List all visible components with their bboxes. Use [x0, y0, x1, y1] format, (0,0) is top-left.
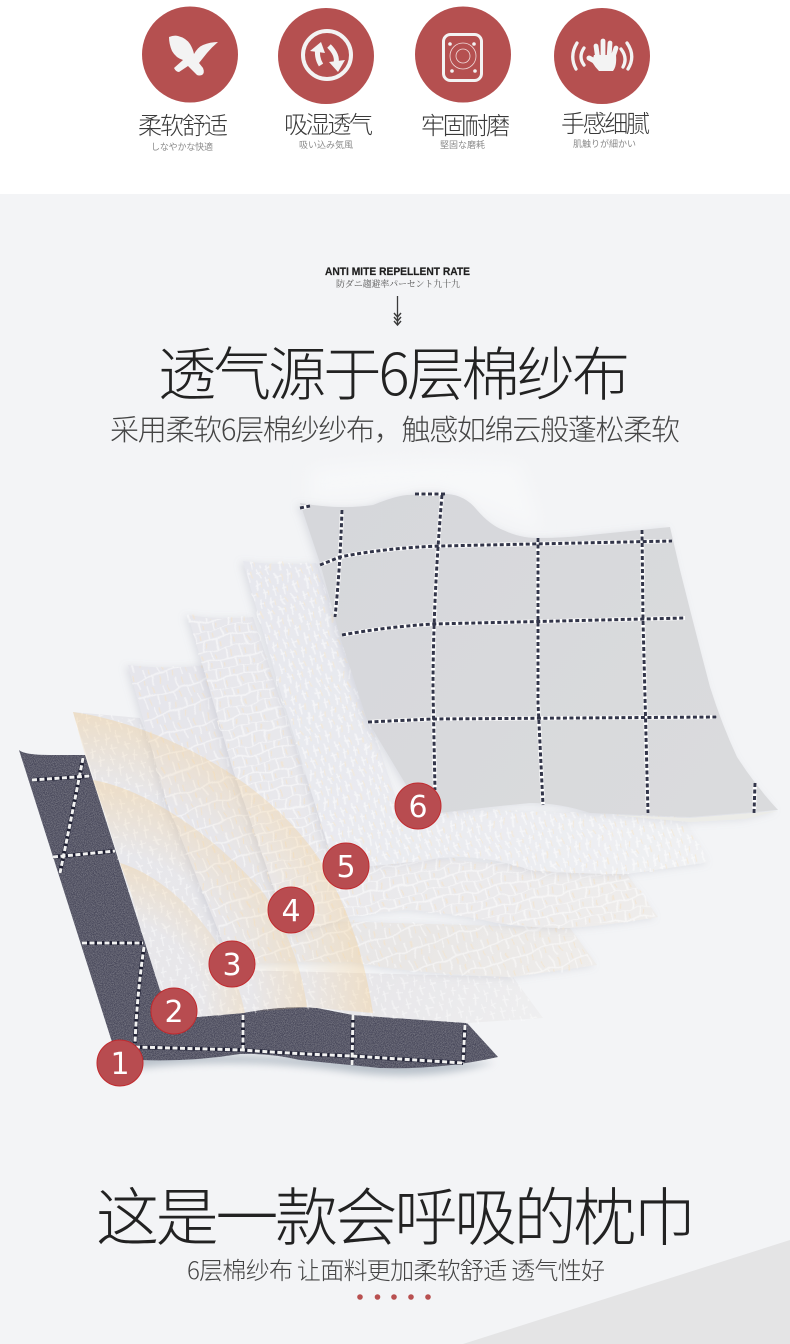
- layer 5: gauze: [243, 561, 710, 880]
- number badge 4: 4: [281, 894, 301, 929]
- english heading: ANTI MITE REPELLENT RATE: [325, 266, 470, 278]
- label: 柔软舒适: [138, 106, 228, 141]
- number badge 4: [268, 887, 314, 933]
- shadow under dark fabric: [112, 1046, 495, 1075]
- icon: butterfly leaf: [142, 6, 238, 102]
- feature: durable: [415, 6, 511, 150]
- decorative red dots: [357, 1294, 431, 1300]
- top white band: [0, 0, 790, 194]
- main title: 透气源于6层棉纱布: [158, 328, 630, 412]
- stitches: [32, 758, 465, 1065]
- soft highlight above grey fabric: [310, 461, 540, 530]
- label: 吸湿透气: [284, 105, 373, 140]
- label: 手感细腻: [561, 104, 650, 139]
- number badge 3: [209, 941, 255, 987]
- stitches: [300, 494, 755, 813]
- bottom heading: 这是一款会呼吸的枕巾: [96, 1168, 696, 1259]
- feature: soft and comfortable: [138, 6, 238, 152]
- number badge 2: [151, 988, 197, 1034]
- layer 1: dark fabric: [19, 750, 498, 1068]
- number badge 6: 6: [408, 790, 428, 825]
- corner grey triangle: [463, 1240, 790, 1344]
- number badge 1: 1: [110, 1047, 130, 1082]
- arrow down: [394, 296, 401, 325]
- sublabel: 肌触りが細かい: [573, 138, 636, 149]
- number badge 5: 5: [336, 850, 356, 885]
- layer 2: gauze: [73, 712, 543, 1023]
- sublabel: 吸い込み気風: [299, 139, 353, 150]
- sublabel: しなやかな快適: [151, 141, 213, 152]
- feature: moisture and breathable: [278, 8, 374, 150]
- number badge 6: [395, 783, 441, 829]
- number badge 3: 3: [222, 948, 242, 983]
- number badge 2: 2: [164, 995, 184, 1030]
- number badge 1: [97, 1040, 143, 1086]
- layer 3: gauze: [128, 665, 597, 977]
- breathable airflow arcs: [73, 712, 373, 1017]
- layer 4: gauze: [188, 615, 658, 935]
- sublabel: 堅固な磨耗: [440, 140, 485, 150]
- subtitle: 采用柔软6层棉纱纱布，触感如绵云般蓬松柔软: [110, 407, 680, 449]
- japanese heading: 防ダニ趨避率パーセント九十九: [336, 278, 460, 289]
- label: 牢固耐磨: [421, 106, 510, 141]
- fabric layers diagram: [19, 461, 778, 1086]
- icon: hand with waves: [554, 8, 650, 104]
- icon: rounded square with rings: [415, 6, 511, 102]
- number badge 5: [323, 843, 369, 889]
- icon: circular arrows: [278, 8, 374, 104]
- layer 6: grey checked fabric: [300, 494, 778, 822]
- feature: delicate touch: [554, 8, 650, 149]
- bottom subheading: 6层棉纱布 让面料更加柔软舒适 透气性好: [187, 1251, 605, 1286]
